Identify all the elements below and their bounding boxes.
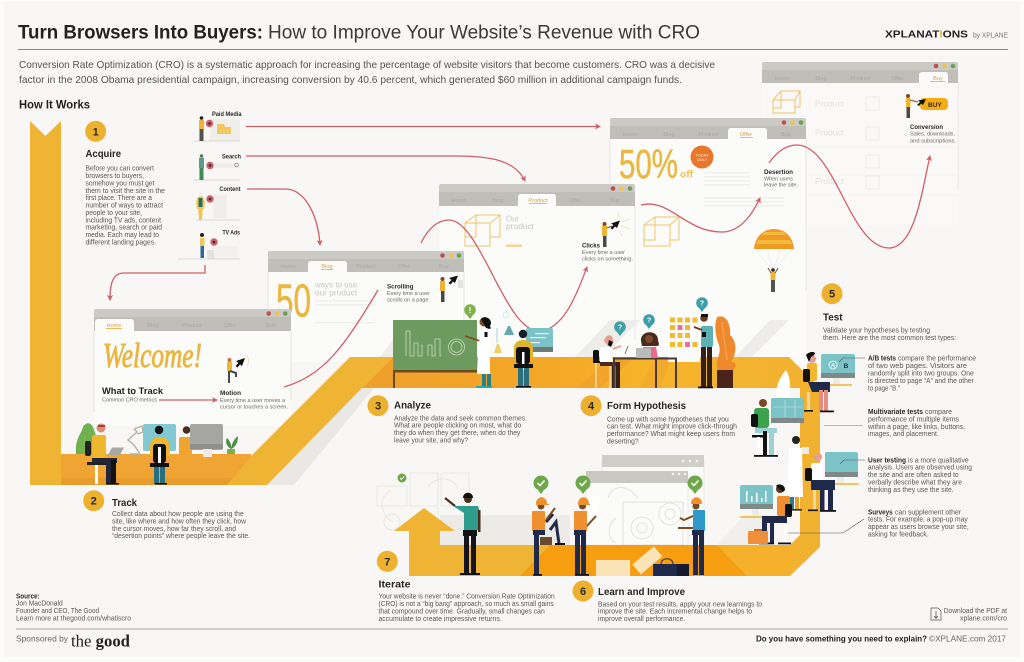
source credit: Founder and CEO, The Good xyxy=(16,608,99,615)
User testing note: verbally describe what they are xyxy=(868,480,962,486)
browser window: Buy: Buy xyxy=(933,76,943,82)
step 1 text: Acquire: somehow you must get xyxy=(86,180,155,187)
browser window: Offer xyxy=(610,118,806,364)
browser window: Home: Offer xyxy=(224,323,236,329)
download note with icon xyxy=(931,608,1007,622)
learn scene: workers and floor items xyxy=(532,476,705,576)
Surveys note: tests. For example, a pop-up may xyxy=(868,517,968,524)
step 3 text: Analyze: leave your site, and why? xyxy=(394,438,468,444)
step 3 text: Analyze: What are people clicking on most, what do xyxy=(394,423,521,430)
step 6 text: Learn and Improve: improve overall performance. xyxy=(598,616,685,623)
logo: Xplanations by Xplane: XPLANAT IONS xyxy=(885,28,968,40)
browser window: Offer: TODAY xyxy=(695,152,709,158)
step 5 text: Test: Validate your hypotheses by testing xyxy=(823,328,930,334)
browser window: Offer: When users xyxy=(764,176,793,182)
sponsor: the good xyxy=(71,632,130,651)
browser window: Blog: ways to use xyxy=(314,280,358,290)
test people on the right band: A xyxy=(831,362,836,370)
step 6 text: Learn and Improve: Based on your test results, apply your new learnings to xyxy=(598,601,762,608)
Multivariate tests note: images, and placement. xyxy=(868,431,939,438)
step 1 text: Acquire: browsers to buyers, xyxy=(86,173,144,180)
path: diagonal ramp xyxy=(227,357,393,485)
title: How to Improve Your Website’s Revenue with CRO xyxy=(268,22,700,44)
step 1 text: Acquire: including TV ads, content xyxy=(86,217,161,224)
browser window: Home: Blog xyxy=(147,323,159,329)
browser window: Offer: ONLY xyxy=(697,157,708,162)
heading: How It Works: How It Works xyxy=(19,100,90,112)
step 1 text: Acquire: people to your site, xyxy=(86,210,142,217)
channel: Paid Media: Paid Media xyxy=(212,111,242,118)
step 1 text: Acquire: Acquire xyxy=(86,148,121,160)
step 7 text: Iterate: that compound over time. Gradually, small changes can xyxy=(378,608,545,616)
browser window: Buy: Blog xyxy=(815,76,827,82)
step 1 text: Acquire: media. Each may lead to xyxy=(86,232,159,239)
browser window: Offer: Home xyxy=(623,132,637,138)
channel: Content xyxy=(196,186,240,220)
motion: figure, cursor and label: Motion xyxy=(220,390,241,397)
A/B tests note: randomly split into two groups. One xyxy=(868,370,974,378)
step 1 text: Acquire: number of ways to attract xyxy=(86,202,163,210)
download note with icon: Download the PDF at xyxy=(944,608,1007,615)
sponsor: Sponsored by xyxy=(16,635,68,644)
step 7 text: Iterate: accumulate to create impressive returns. xyxy=(378,616,502,623)
clicks: figure, cursor and label: Every time a user xyxy=(582,250,625,256)
User testing note: thinking as they use the site. xyxy=(868,487,954,494)
step 1 text: Acquire: them to visit the site in the xyxy=(86,188,165,195)
step 2 text: Track: the cursor moves, how far they scroll, and xyxy=(112,526,236,533)
hypothesis scene: people, table, sticky notes, plant: ? xyxy=(647,318,651,324)
source credit xyxy=(16,593,131,622)
browser window: Home: Welcome! xyxy=(103,336,202,375)
browser window: Buy: Offer xyxy=(892,76,904,82)
step 7 text: Iterate: Your website is never “done.” Conversion Rate Optimization xyxy=(378,594,555,601)
path: left vertical band with chevron xyxy=(30,121,61,485)
Surveys note xyxy=(788,509,969,538)
step 1 text: Acquire: first place. There are a xyxy=(86,195,152,202)
step 4 text: Form Hypothesis: Form Hypothesis xyxy=(607,400,686,412)
footer call to action xyxy=(756,634,1007,643)
browser window: Offer: 50% xyxy=(619,141,678,187)
download note with icon: xplane.com/cro xyxy=(960,615,1007,622)
step 5 badge xyxy=(822,283,842,304)
step 3 text: Analyze xyxy=(394,400,527,444)
channel: TV Ads: TV Ads xyxy=(222,230,240,236)
Multivariate tests note: compare xyxy=(925,409,952,416)
scrolling: figure, cursor and label: Every time a user xyxy=(387,291,430,297)
footer call to action: Do you have something you need to explain? xyxy=(756,634,927,643)
step 1 badge: 1 xyxy=(93,126,99,138)
motion: figure, cursor and label xyxy=(220,356,288,410)
browser window: Product: Buy xyxy=(610,198,620,204)
analyze scene: chart board, scientist, analyst xyxy=(393,304,553,388)
step 6 text: Learn and Improve: improve the site. Each incremental change helps to xyxy=(598,609,752,616)
clicks: figure, cursor and label: clicks on something. xyxy=(582,256,633,262)
test people on the right band: B xyxy=(844,363,849,370)
step 7 text: Iterate xyxy=(378,578,555,623)
clicks: figure, cursor and label: Clicks xyxy=(582,242,601,250)
Multivariate tests note xyxy=(824,409,965,438)
step 2 text: Track xyxy=(112,497,250,540)
step 6 text: Learn and Improve xyxy=(598,586,762,623)
conversion: buy button, figure and label: and subscriptions. xyxy=(910,138,956,144)
A/B tests note xyxy=(839,356,976,392)
step 1 text: Acquire: Before you can convert xyxy=(86,166,154,173)
hypothesis scene: people, table, sticky notes, plant xyxy=(593,297,736,388)
browser window: Offer: Offer xyxy=(740,132,752,138)
logo: Xplanations by Xplane: by XPLANE xyxy=(973,30,1008,40)
browser window: Blog: Product xyxy=(356,264,376,270)
footer call to action: ©XPLANE.com 2017 xyxy=(929,634,1007,643)
step 1 badge xyxy=(85,121,106,142)
sponsor xyxy=(16,632,130,651)
channel: Content: Content xyxy=(220,186,240,193)
clicks: figure, cursor and label xyxy=(582,212,633,262)
browser window: Product: product xyxy=(506,222,535,231)
title: Turn Browsers Into Buyers: xyxy=(18,22,263,44)
browser window: Product: Offer xyxy=(569,198,581,204)
conversion: buy button, figure and label: Sales, downloads, xyxy=(910,132,955,138)
title xyxy=(18,22,700,44)
step 1 text: Acquire xyxy=(86,148,165,246)
browser window: Offer: Blog xyxy=(663,132,675,138)
step 5 badge: 5 xyxy=(829,289,835,301)
Surveys note: Surveys xyxy=(868,509,893,516)
Multivariate tests note: within a page, like links, buttons, xyxy=(867,424,965,431)
browser window: Blog: Offer xyxy=(398,264,410,270)
shadow behind upper floor xyxy=(380,320,789,357)
browser window: Product: Product xyxy=(528,198,548,204)
hypothesis scene: people, table, sticky notes, plant: ? xyxy=(618,324,622,332)
browser window: Home: Common CRO metrics xyxy=(102,398,157,404)
browser window: Offer: Product xyxy=(698,132,718,138)
source credit: Learn more at thegood.com/whatiscro xyxy=(16,615,131,622)
step 7 text: Iterate: (CRO) is not a “big bang” approach, so much as small gains xyxy=(378,601,554,608)
hypothesis scene: people, table, sticky notes, plant: ? xyxy=(700,300,704,308)
A/B tests note: compare the performance xyxy=(898,356,976,363)
conversion: buy button, figure and label: Conversion xyxy=(910,124,943,131)
User testing note: User testing xyxy=(868,457,906,464)
step 5 text: Test xyxy=(823,312,956,342)
step 2 badge: 2 xyxy=(91,496,97,508)
browser window: Home: Home xyxy=(107,323,121,329)
browser window: Product xyxy=(439,184,635,366)
scrolling: figure, cursor and label: scrolls on a page. xyxy=(387,298,430,304)
step 4 badge: 4 xyxy=(588,401,595,413)
browser window: Home xyxy=(94,309,291,426)
step 6 text: Learn and Improve: Learn and Improve xyxy=(598,586,685,598)
step 7 badge: 7 xyxy=(384,556,390,568)
browser window: Home: Buy xyxy=(266,323,276,329)
Multivariate tests note: Multivariate tests xyxy=(868,409,923,416)
channel: TV Ads xyxy=(178,230,240,259)
conversion: buy button, figure and label: BUY xyxy=(928,102,942,109)
step 4 badge xyxy=(580,395,602,416)
A/B tests note: of two web pages. Visitors are xyxy=(868,363,967,370)
step 3 badge xyxy=(368,395,388,416)
step 2 text: Track: Track xyxy=(112,497,137,509)
browser window: Offer: Desertion xyxy=(764,169,793,176)
step 1 text: Acquire: different landing pages. xyxy=(86,239,156,246)
step 4 text: Form Hypothesis xyxy=(607,400,737,446)
browser window: Buy xyxy=(762,62,958,225)
Multivariate tests note: performance of multiple items xyxy=(868,416,960,423)
source credit: Jon MacDonald xyxy=(16,600,63,608)
browser window: Home: Product xyxy=(182,323,202,329)
motion: figure, cursor and label: Every time a user moves a xyxy=(220,398,286,404)
browser window: Offer: off xyxy=(680,170,694,181)
wireframes behind iterate and learn scenes xyxy=(377,455,775,545)
Surveys note: appear as users browse your site, xyxy=(868,524,969,531)
motion: figure, cursor and label: cursor or touches a screen. xyxy=(220,404,288,410)
browser window: Buy: Product xyxy=(850,76,870,82)
browser window: Offer: leave the site. xyxy=(764,183,798,189)
logo: Xplanations by Xplane xyxy=(885,28,1008,40)
User testing note: is a more qualitative xyxy=(908,457,969,464)
browser window: Blog: Blog xyxy=(321,264,333,270)
step 3 text: Analyze: they do when they get there, when do they xyxy=(394,430,521,437)
path: upper floor and right band xyxy=(362,357,820,576)
User testing note xyxy=(840,457,972,494)
track scene: plant, desks and people xyxy=(76,423,238,485)
browser window: Product: Home xyxy=(452,198,466,204)
browser window: Buy: Product xyxy=(815,100,845,109)
shadow under ramp xyxy=(267,388,374,485)
intro text: Conversion Rate Optimization (CRO) is a systematic approach for increasing the percentage of website visitors that become customers. CRO was a decisive xyxy=(19,60,715,71)
intro text xyxy=(19,60,715,86)
step 7 badge xyxy=(377,551,398,572)
User testing note: analysis. Users are observed using xyxy=(868,465,972,472)
channel: Search: Search xyxy=(222,154,241,160)
browser window: Blog: 50 xyxy=(276,274,311,326)
browser window: Blog: Home xyxy=(281,264,295,270)
channel: Search xyxy=(194,154,241,180)
browser window: Buy: Product xyxy=(815,177,845,186)
step 6 badge xyxy=(572,580,594,602)
step 2 text: Track: Collect data about how people are using the xyxy=(112,511,244,518)
step 4 text: Form Hypothesis: deserting? xyxy=(607,438,639,446)
step 2 text: Track: site, like where and how often they click, how xyxy=(112,518,246,525)
step 1 text: Acquire: marketing, search or paid xyxy=(86,225,162,232)
browser window: Home: What to Track xyxy=(102,386,164,397)
path: left floor xyxy=(61,454,251,485)
step 2 text: Track: “desertion points” where people leave the site. xyxy=(112,533,250,540)
step 7 text: Iterate: Iterate xyxy=(378,578,411,590)
browser window: Product: Our xyxy=(506,214,519,224)
intro text: factor in the 2008 Obama presidential campaign, increasing conversion by 40.6 percent, which generated $60 million in additional campaign funds. xyxy=(19,75,682,86)
A/B tests note: A/B tests xyxy=(868,356,896,363)
scrolling: figure, cursor and label: Scrolling xyxy=(387,284,414,291)
step 5 text: Test: them. Here are the most common test types: xyxy=(823,335,956,342)
step 2 badge xyxy=(83,490,104,511)
test people on the right band xyxy=(740,352,859,544)
browser window: Offer: Buy xyxy=(781,132,791,138)
Surveys note: can supplement other xyxy=(895,509,962,516)
step 4 text: Form Hypothesis: performance? What might keep users from xyxy=(607,431,735,438)
analyze scene: chart board, scientist, analyst: ! xyxy=(469,306,471,315)
parachute figure xyxy=(754,229,794,292)
step 4 text: Form Hypothesis: Come up with some hypotheses that you xyxy=(607,416,729,423)
source credit: Source: xyxy=(16,593,40,600)
channel: Paid Media xyxy=(194,111,242,141)
step 6 badge: 6 xyxy=(580,586,586,598)
conversion: buy button, figure and label xyxy=(906,94,956,144)
browser window: Product: Blog xyxy=(492,198,504,204)
browser window: Blog xyxy=(268,251,464,362)
step 3 badge: 3 xyxy=(375,401,381,413)
step 3 text: Analyze: Analyze xyxy=(394,400,431,412)
browser window: Buy: Home xyxy=(775,76,789,82)
scrolling: figure, cursor and label xyxy=(387,276,463,304)
A/B tests note: to page “B.” xyxy=(868,385,901,392)
step 5 text: Test: Test xyxy=(823,312,843,324)
browser window: Blog: our product xyxy=(315,289,358,298)
Surveys note: asking for feedback. xyxy=(868,532,929,538)
step 4 text: Form Hypothesis: can test. What might improve click-through xyxy=(607,424,737,431)
step 3 text: Analyze: Analyze the data and seek common themes. xyxy=(394,415,527,422)
browser window: Blog: Buy xyxy=(439,264,449,270)
iterate scene: person at wireframe xyxy=(398,474,480,575)
red flow lines and arrows xyxy=(110,126,930,400)
A/B tests note: is directed to page “A” and the other xyxy=(868,378,974,385)
path: iterate arrow and lower floor xyxy=(394,508,795,576)
User testing note: the site and are often asked to xyxy=(868,472,959,479)
browser window: Buy: Product xyxy=(815,129,845,138)
